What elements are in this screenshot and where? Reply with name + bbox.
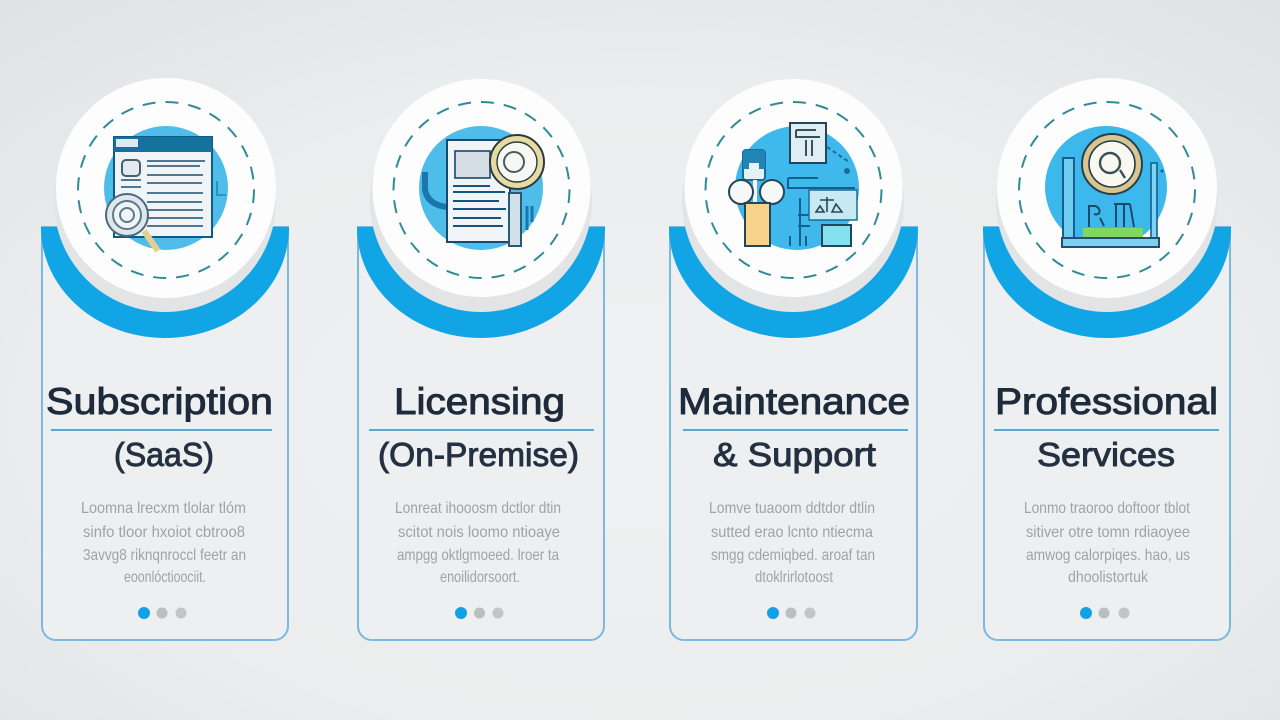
icon: web page with magnifier — [106, 137, 226, 251]
title: Maintenance — [678, 381, 910, 422]
blue crescent — [983, 227, 1231, 338]
body text: Lonmo traoroo doftoor tblot — [1024, 500, 1190, 517]
subtitle: (On-Premise) — [378, 436, 579, 473]
body text: Lonreat ihooosm dctlor dtin — [395, 500, 561, 517]
divider — [994, 429, 1219, 431]
title: Subscription — [46, 381, 273, 422]
body text — [1024, 500, 1190, 586]
card outline — [984, 227, 1230, 640]
icon: document with magnifier — [425, 135, 544, 246]
body text: enoilidorsoort. — [440, 569, 520, 586]
blue crescent — [357, 227, 605, 338]
pagination dots — [767, 607, 816, 619]
subtitle: & Support — [713, 436, 876, 473]
body text: sutted erao lcnto ntiecma — [711, 524, 873, 541]
panel: Professional Services — [983, 78, 1231, 640]
body text: amwog calorpiqes. hao, us — [1026, 547, 1190, 564]
body text: dhoolistortuk — [1068, 569, 1149, 586]
subtitle: Services — [1037, 436, 1175, 473]
divider — [51, 429, 272, 431]
body text: scitot nois loomo ntioaye — [398, 524, 560, 541]
body text: Loomna lrecxm tlolar tlóm — [81, 500, 246, 517]
card outline — [358, 227, 604, 640]
panel: Maintenance & Support — [669, 79, 918, 640]
divider — [683, 429, 908, 431]
body text: sinfo tloor hxoiot cbtroo8 — [83, 524, 245, 541]
pagination dots — [455, 607, 504, 619]
blue crescent — [669, 227, 918, 338]
title: Professional — [995, 381, 1218, 422]
card outline — [42, 227, 288, 640]
icon disc — [996, 78, 1218, 312]
body text: smgg cdemiqbed. aroaf tan — [711, 547, 875, 564]
icon disc — [370, 79, 592, 312]
icon disc — [54, 78, 276, 312]
body text — [81, 500, 246, 586]
body text — [395, 500, 561, 586]
body text: 3avvg8 riknqnroccl feetr an — [83, 547, 246, 564]
card outline — [670, 227, 917, 640]
panel: Licensing (On-Premise) — [357, 79, 605, 640]
pagination dots — [138, 607, 186, 619]
body text: sitiver otre tomn rdiaoyee — [1026, 524, 1190, 541]
body text — [709, 500, 875, 586]
blue crescent — [41, 227, 289, 338]
icon: support equipment — [729, 123, 857, 246]
body text: ampgg oktlgmoeed. lroer ta — [397, 547, 559, 564]
icon disc — [682, 79, 904, 312]
pagination dots — [1080, 607, 1130, 619]
icon: services workbench — [1062, 134, 1164, 247]
body text: eoonlóctioociit. — [124, 569, 206, 586]
panel: Subscription (SaaS) — [41, 78, 289, 640]
body text: Lomve tuaoom ddtdor dtlin — [709, 500, 875, 517]
divider — [369, 429, 594, 431]
title: Licensing — [394, 381, 565, 422]
body text: dtoklrirlotoost — [755, 569, 833, 586]
subtitle: (SaaS) — [114, 436, 214, 473]
